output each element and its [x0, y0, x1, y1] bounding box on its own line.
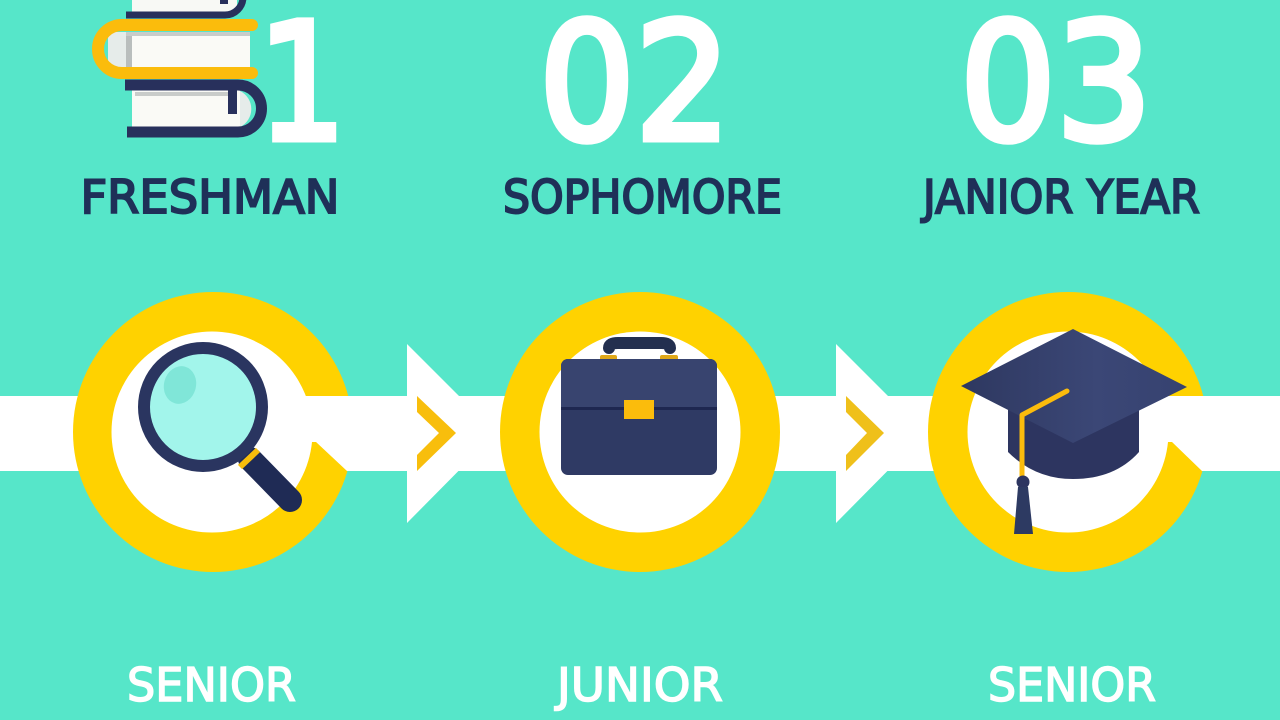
label: senior: SENIOR — [127, 658, 296, 712]
timeline band — [0, 396, 1280, 471]
icon: briefcase — [561, 343, 717, 475]
icon: book stack — [98, 0, 261, 132]
icon: graduation cap — [961, 329, 1187, 534]
middle book — [98, 25, 252, 73]
ring: briefcase step — [500, 292, 780, 572]
arrow: first to second — [407, 344, 496, 523]
label: junior: JUNIOR — [554, 658, 723, 712]
ring: graduation step — [928, 292, 1213, 572]
heading: janior year: JANIOR YEAR — [920, 170, 1200, 224]
arrow: second to third — [836, 344, 925, 523]
heading: sophomore: SOPHOMORE — [503, 170, 782, 224]
label: senior: SENIOR — [988, 658, 1156, 712]
icon: magnifying glass — [144, 348, 290, 500]
ring: magnifier step — [73, 292, 358, 572]
top book — [126, 0, 243, 15]
bottom book — [125, 85, 261, 132]
heading: freshman: FRESHMAN — [80, 170, 340, 224]
